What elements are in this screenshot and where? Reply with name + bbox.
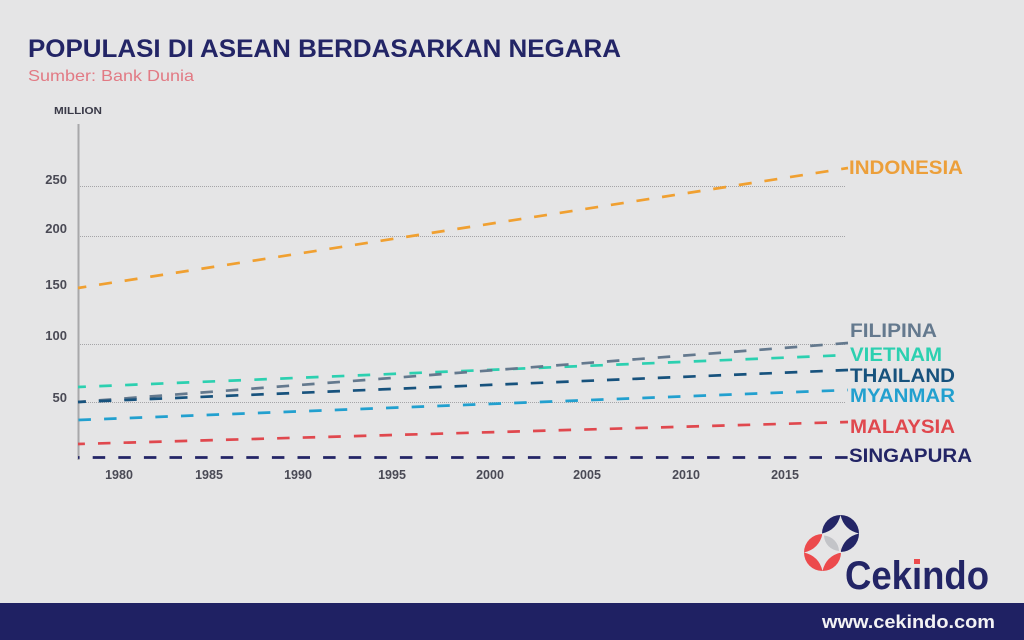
x axis labels: 2005 (573, 468, 601, 482)
wordmark: Cekindo (845, 554, 989, 598)
series: Malaysia (78, 422, 848, 444)
y axis labels: 100 (45, 328, 67, 343)
label: Filipina: FILIPINA (850, 321, 937, 342)
label: Malaysia: MALAYSIA (850, 417, 955, 438)
y axis unit label: MILLION (54, 106, 102, 117)
series: Vietnam (78, 355, 848, 387)
series: Thailand (78, 370, 848, 402)
label: Thailand: THAILAND (850, 366, 955, 387)
i dot accent (914, 559, 920, 564)
x axis labels: 2000 (476, 468, 504, 482)
footer bar (0, 603, 1024, 640)
x axis labels (105, 468, 799, 482)
y axis labels: 200 (45, 221, 67, 236)
line chart (45, 106, 972, 482)
label: Indonesia: INDONESIA (849, 158, 963, 179)
icon: logo mark (804, 515, 859, 571)
y axis labels (45, 172, 67, 405)
series: Singapura (78, 456, 848, 459)
series: Filipina (78, 343, 848, 402)
label: Myanmar: MYANMAR (850, 386, 955, 407)
y axis labels: 250 (45, 172, 67, 187)
footer url: www.cekindo.com (821, 611, 995, 632)
title: POPULASI DI ASEAN BERDASARKAN NEGARA (28, 35, 621, 63)
label: Vietnam: VIETNAM (850, 345, 942, 366)
y axis labels: 50 (53, 390, 67, 405)
y axis labels: 150 (45, 277, 67, 292)
x axis labels: 2015 (771, 468, 799, 482)
x axis labels: 1985 (195, 468, 223, 482)
y axis (78, 124, 80, 460)
x axis labels: 2010 (672, 468, 700, 482)
logo: Cekindo (804, 515, 989, 598)
subtitle: source: Sumber: Bank Dunia (28, 68, 194, 85)
series: Myanmar (78, 390, 848, 420)
label: Singapura: SINGAPURA (849, 446, 972, 467)
x axis labels: 1980 (105, 468, 133, 482)
series: Indonesia (78, 168, 848, 288)
x axis labels: 1990 (284, 468, 312, 482)
x axis labels: 1995 (378, 468, 406, 482)
